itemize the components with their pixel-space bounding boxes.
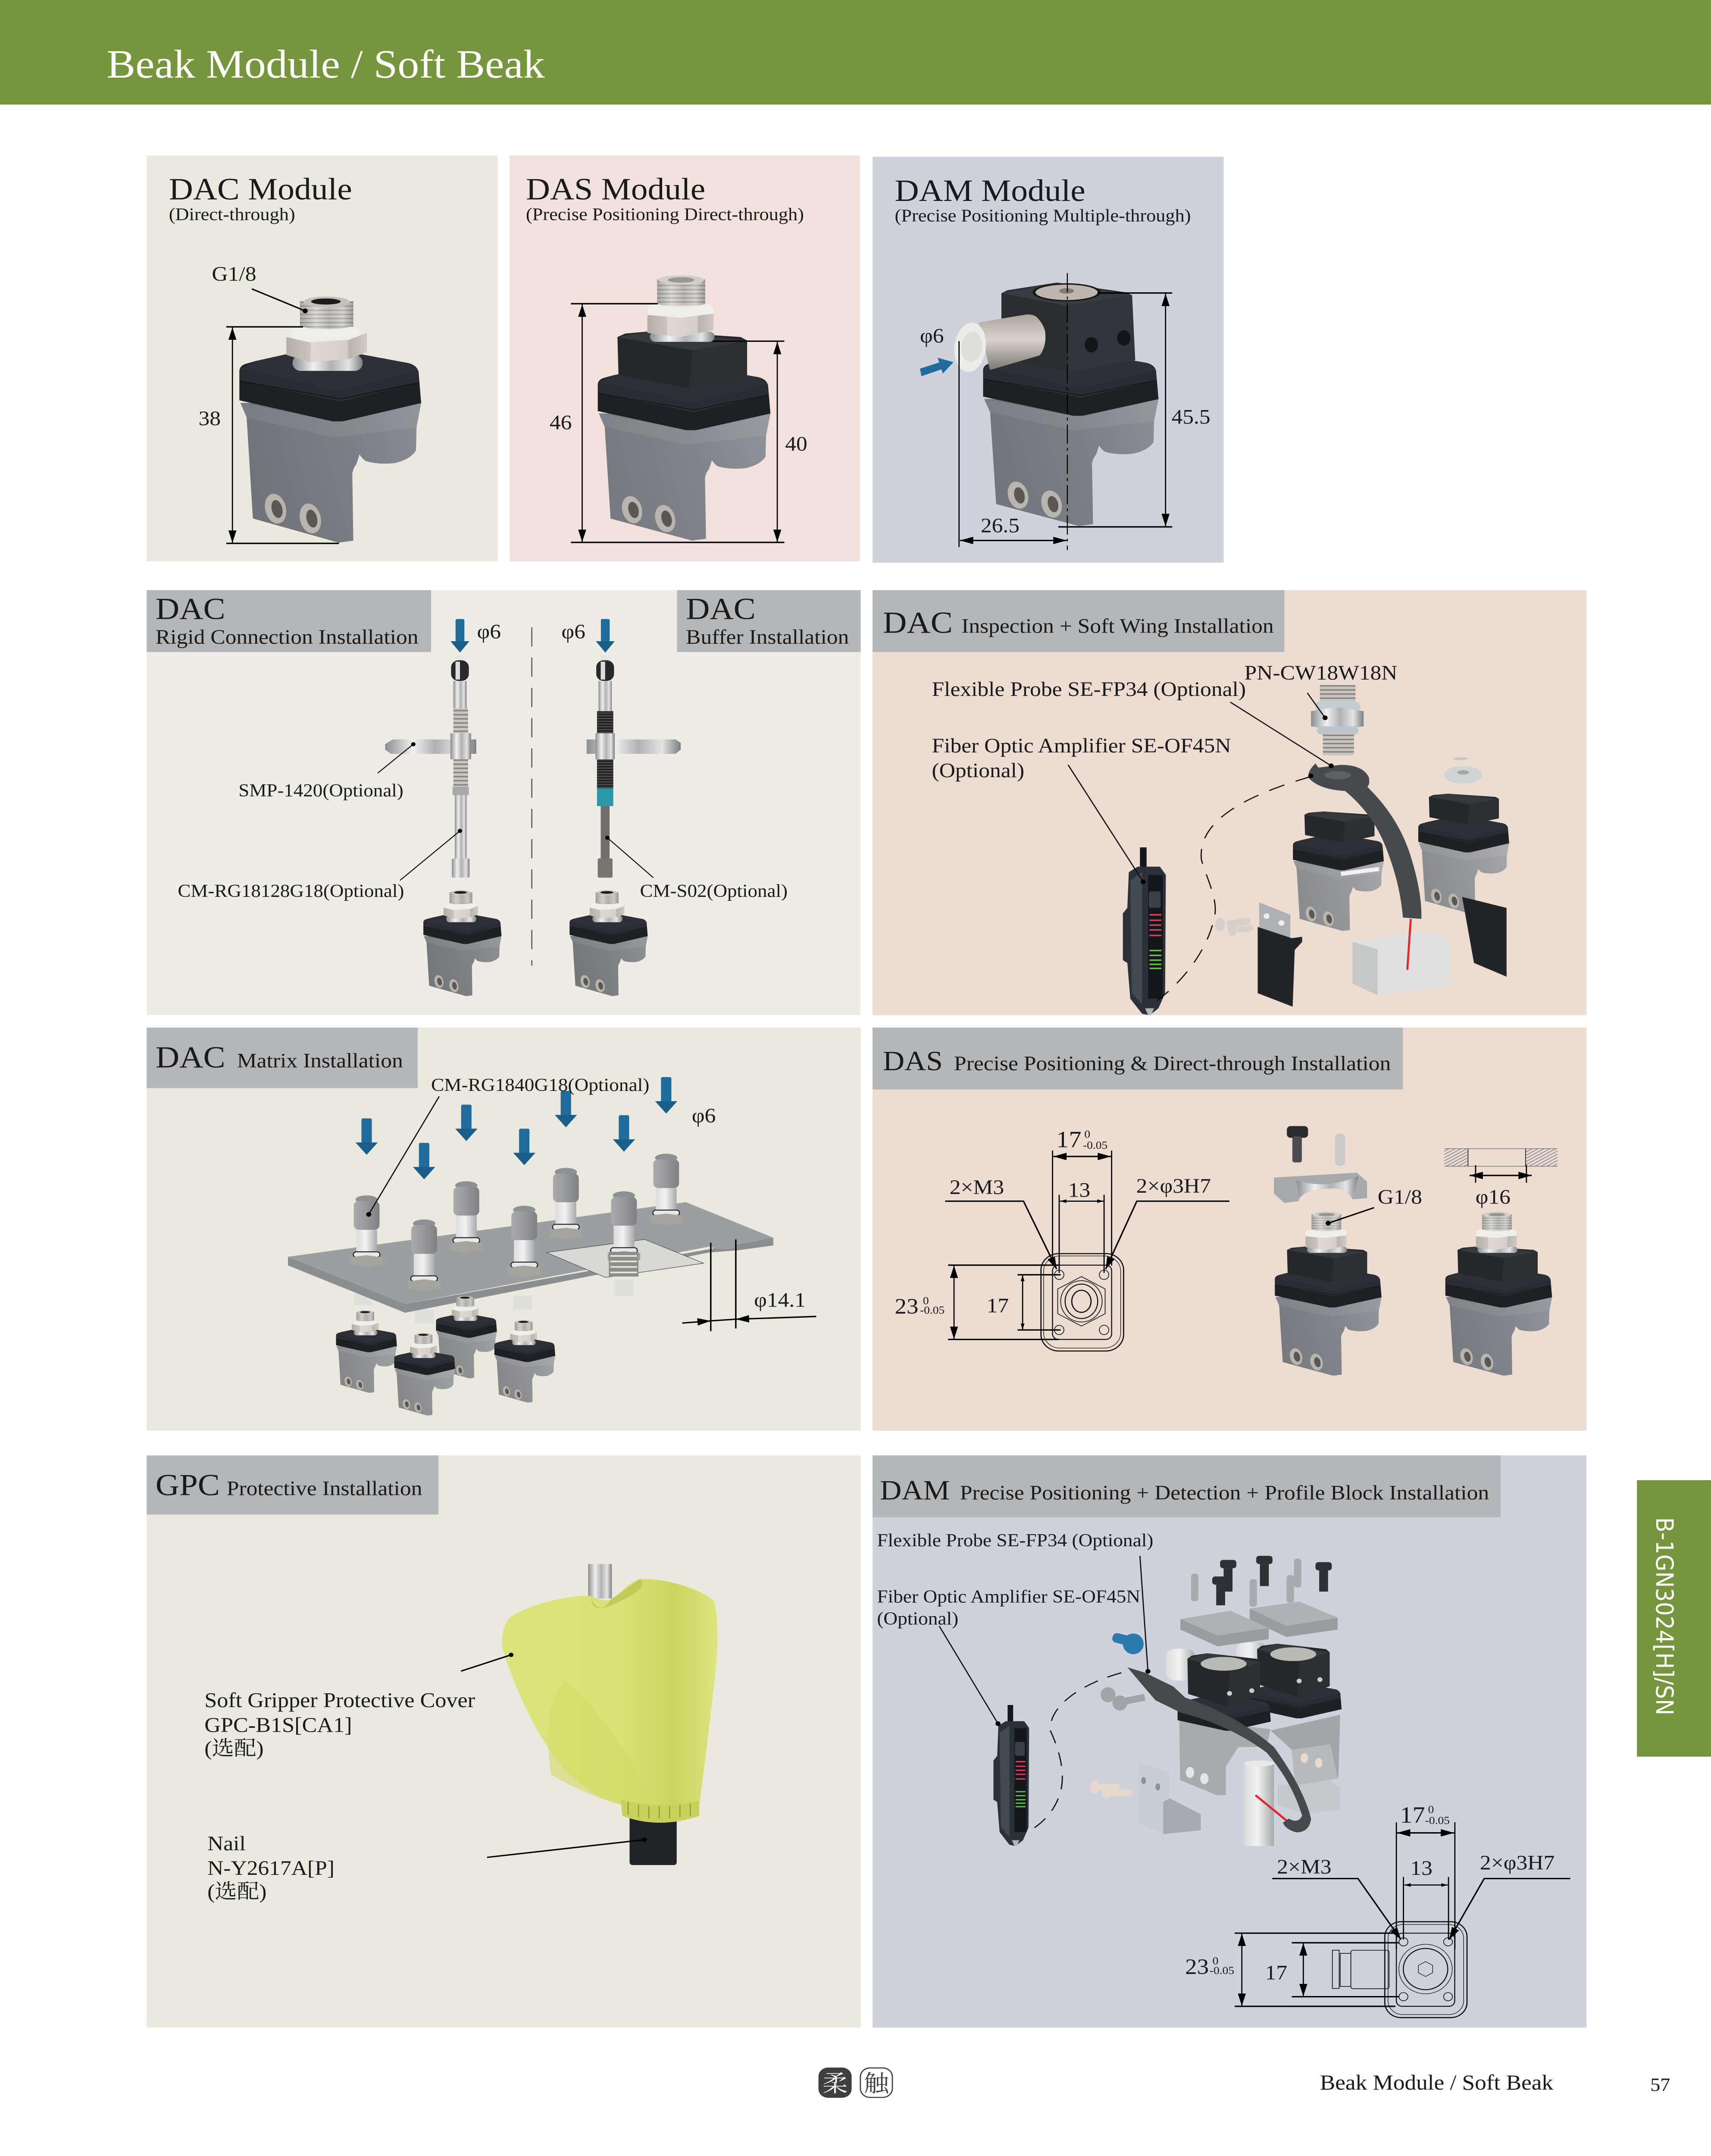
leader: amplifier bbox=[1068, 765, 1146, 884]
callout: G1/8: G1/8 bbox=[212, 262, 256, 285]
fitting: PN-CW18W18N bbox=[1311, 685, 1364, 755]
callout: cover bbox=[204, 1689, 475, 1760]
dimension: φ14.1: φ14.1 bbox=[754, 1288, 806, 1311]
label: flexible probe: Flexible Probe SE-FP34 (Optional) bbox=[877, 1530, 1153, 1550]
panel: GPC protective installation bbox=[147, 1455, 861, 2028]
callout: nail: Nail bbox=[207, 1832, 246, 1855]
section drawing: φ16 hole bbox=[1444, 1149, 1558, 1208]
logo bbox=[819, 2065, 892, 2099]
red laser line bbox=[1255, 1795, 1286, 1821]
part: left soft gripper module bbox=[1293, 812, 1384, 931]
heading tab: inspection: DAC bbox=[883, 605, 953, 639]
part: left jaw plate bbox=[1257, 903, 1302, 1007]
dimension: 17 bbox=[987, 1275, 1060, 1330]
heading tab: DAS: DAS bbox=[883, 1046, 943, 1076]
parts: dowel pins bbox=[1191, 1558, 1301, 1607]
dimension: 13: 13 bbox=[1410, 1857, 1433, 1880]
dimension: 23 tolerance: -0.05 bbox=[1210, 1964, 1234, 1977]
dimension: 38 bbox=[198, 327, 339, 543]
inlet arrows bbox=[356, 1077, 677, 1179]
dimension: 17 tolerance: -0.05 bbox=[1425, 1814, 1450, 1827]
logo: 触 bbox=[864, 2065, 890, 2099]
label: fiber optic amplifier bbox=[877, 1587, 1140, 1629]
part: left block and cap bbox=[1178, 1653, 1271, 1731]
product photo: DAS module bbox=[598, 275, 770, 541]
panel: DAM Module bbox=[873, 157, 1223, 563]
heading tab: buffer bbox=[677, 590, 861, 652]
panel: DAS Module bbox=[510, 155, 860, 561]
dimension: 40: 40 bbox=[785, 432, 807, 455]
callout: 2×φ3H7: 2×φ3H7 bbox=[1136, 1175, 1211, 1197]
panel: DAC Module bbox=[147, 155, 498, 561]
callout: CM-RG18128G18 bbox=[178, 829, 462, 901]
heading: DAM Module: DAM Module bbox=[895, 173, 1085, 208]
part: right gripper body bbox=[1270, 1715, 1340, 1814]
heading tab: matrix: Matrix Installation bbox=[237, 1049, 403, 1072]
callout: nail bbox=[207, 1832, 335, 1903]
leader: PN fitting bbox=[1307, 693, 1328, 720]
panel: DAC matrix installation bbox=[147, 1028, 861, 1431]
subtitle: precise positioning direct-through: (Precise Positioning Direct-through) bbox=[526, 205, 804, 224]
dimension: 13 bbox=[1404, 1857, 1448, 1940]
heading tab: inspection bbox=[873, 590, 1284, 652]
heading tab: rigid connection: DAC bbox=[156, 592, 225, 626]
fiber optic amplifier bbox=[994, 1705, 1029, 1846]
side tab bbox=[1637, 1480, 1711, 1757]
section drawing: φ16 hole: φ16 bbox=[1476, 1185, 1511, 1208]
part: clamp bracket bbox=[1274, 1173, 1367, 1203]
heading tab: buffer: Buffer Installation bbox=[686, 626, 849, 649]
label: fiber optic amplifier: Fiber Optic Amplifier SE-OF45N bbox=[877, 1587, 1140, 1607]
part: screws bbox=[1215, 917, 1254, 936]
label: fiber optic amplifier: (Optional) bbox=[932, 759, 1024, 782]
part: L bracket bbox=[1139, 1762, 1201, 1834]
lower fitting stubs bbox=[354, 1279, 633, 1323]
part: white elbows bbox=[1166, 1642, 1266, 1680]
arrow: rigid inlet φ6 bbox=[450, 619, 501, 652]
callout: cover: GPC-B1S[CA1] bbox=[204, 1713, 352, 1736]
dimension: 45.5: 45.5 bbox=[1171, 405, 1211, 428]
red laser line bbox=[1408, 919, 1411, 970]
dimension: 17 tolerance: 17 bbox=[1056, 1127, 1082, 1153]
label: φ6: φ6 bbox=[692, 1104, 716, 1127]
dimension: 17 tolerance: 17 bbox=[1400, 1802, 1425, 1828]
callout: nail: (选配) bbox=[207, 1880, 266, 1903]
logo: 柔 bbox=[823, 2065, 848, 2099]
dimension: 26.5: 26.5 bbox=[981, 514, 1020, 537]
part: blue plug bbox=[1111, 1632, 1144, 1654]
dimension: 46: 46 bbox=[550, 411, 572, 434]
dimension: 23 tolerance: 23 bbox=[1185, 1955, 1209, 1979]
callout: 2×φ3H7 bbox=[1449, 1851, 1570, 1940]
callout: 2×M3 bbox=[1272, 1855, 1401, 1940]
heading: DAC Module: DAC Module bbox=[169, 172, 352, 207]
dimension: 17: 17 bbox=[987, 1294, 1009, 1317]
arrow: rigid inlet φ6: φ6 bbox=[477, 620, 501, 643]
part: gray screws bbox=[1101, 1687, 1145, 1711]
label: PN-CW18W18N: PN-CW18W18N bbox=[1245, 661, 1398, 684]
dimension: 23 tolerance: -0.05 bbox=[920, 1304, 945, 1316]
callout: 2×φ3H7: 2×φ3H7 bbox=[1480, 1851, 1555, 1874]
dimension: 13: 13 bbox=[1068, 1178, 1090, 1201]
subtitle: direct-through: (Direct-through) bbox=[169, 205, 295, 224]
callout: 2×φ3H7 bbox=[1106, 1175, 1229, 1269]
side tab label: B-1GN3024[H]/SN bbox=[1650, 1517, 1678, 1715]
mounting plate bbox=[288, 1202, 773, 1313]
heading tab: buffer: DAC bbox=[686, 592, 756, 626]
arrow: buffer inlet φ6 bbox=[561, 619, 615, 652]
dimension: 45.5 bbox=[1058, 293, 1211, 527]
part: flexible probe bbox=[1127, 1667, 1311, 1832]
dimension: 17 bbox=[1265, 1943, 1399, 1997]
heading tab: rigid connection: Rigid Connection Installation bbox=[156, 626, 419, 649]
callout: CM-S02 bbox=[605, 836, 788, 901]
icon: blue inlet arrow bbox=[920, 357, 954, 376]
heading tab: GPC: GPC bbox=[156, 1468, 220, 1502]
heading tab: matrix: DAC bbox=[156, 1040, 225, 1074]
part: cylinder workpiece bbox=[1245, 1761, 1274, 1846]
part: right block and cap bbox=[1248, 1644, 1342, 1718]
heading tab: DAS: Precise Positioning & Direct-through Installation bbox=[954, 1052, 1391, 1075]
heading tab: DAM bbox=[873, 1455, 1501, 1517]
part: mounting plates bbox=[1180, 1601, 1338, 1646]
dimension: 23 tolerance bbox=[895, 1265, 1059, 1339]
dimension: 46 bbox=[550, 304, 785, 542]
callout: nail: N-Y2617A[P] bbox=[207, 1857, 335, 1880]
dimension: 38: 38 bbox=[198, 407, 221, 429]
leader: flexible probe bbox=[1230, 702, 1334, 778]
panel: DAM precise positioning and detection bbox=[873, 1455, 1586, 2028]
arrow: buffer inlet φ6: φ6 bbox=[561, 620, 585, 643]
page title: Beak Module / Soft Beak bbox=[106, 42, 545, 86]
header banner bbox=[0, 0, 1711, 104]
heading tab: matrix bbox=[147, 1028, 418, 1088]
air fittings array bbox=[350, 1154, 682, 1291]
dimension: 23 tolerance: 23 bbox=[895, 1294, 919, 1319]
dashed fiber cable bbox=[1157, 777, 1311, 1001]
callout: 2×M3: 2×M3 bbox=[1277, 1855, 1332, 1878]
rod assembly: buffer bbox=[587, 655, 681, 877]
callout: G1/8 bbox=[212, 262, 308, 313]
protective cover on gripper bbox=[502, 1564, 718, 1865]
fiber optic amplifier bbox=[1123, 847, 1166, 1015]
part: cream screws bbox=[1090, 1781, 1132, 1799]
panel: DAC rigid and buffer installation bbox=[147, 590, 861, 1015]
label: φ6: φ6 bbox=[920, 324, 944, 347]
part: white block bbox=[1352, 931, 1450, 995]
heading tab: DAS bbox=[873, 1028, 1403, 1090]
label: flexible probe: Flexible Probe SE-FP34 (Optional) bbox=[932, 678, 1246, 701]
dimension: φ14.1 bbox=[682, 1239, 816, 1331]
dimension: 17 tolerance bbox=[1053, 1127, 1112, 1266]
leader: nail bbox=[487, 1837, 647, 1857]
technical drawing: DAM footprint bbox=[1333, 1922, 1467, 2018]
module: DAS right bbox=[1445, 1212, 1552, 1376]
part: right soft gripper module bbox=[1418, 794, 1509, 913]
dimension: 17 tolerance bbox=[1396, 1802, 1455, 1949]
dimension: 17: 17 bbox=[1265, 1961, 1287, 1984]
callout: CM-RG18128G18: CM-RG18128G18(Optional) bbox=[178, 881, 404, 901]
product photo: DAM module bbox=[952, 282, 1158, 526]
heading: DAS Module: DAS Module bbox=[526, 172, 705, 207]
label: CM-RG1840G18: CM-RG1840G18(Optional) bbox=[431, 1075, 649, 1095]
callout: G1/8 bbox=[1326, 1185, 1422, 1225]
module: rigid bbox=[423, 890, 501, 996]
dimension: 17 tolerance: 0 bbox=[1084, 1128, 1090, 1140]
rod assembly: rigid bbox=[385, 655, 476, 877]
leader: amplifier bbox=[939, 1626, 1001, 1726]
label: fiber optic amplifier: (Optional) bbox=[877, 1609, 958, 1629]
dimension: 17 tolerance: 0 bbox=[1428, 1803, 1434, 1815]
page number: 57 bbox=[1650, 2075, 1670, 2095]
heading tab: inspection: Inspection + Soft Wing Installation bbox=[961, 614, 1274, 637]
dashed fiber cable bbox=[1029, 1673, 1121, 1831]
subtitle: precise positioning multiple-through: (Precise Positioning Multiple-through) bbox=[895, 206, 1191, 226]
dimension: 23 tolerance: 0 bbox=[923, 1294, 929, 1307]
parts: screws bbox=[1212, 1556, 1332, 1605]
module: DAS left bbox=[1275, 1212, 1382, 1376]
callout: 2×M3 bbox=[945, 1176, 1057, 1269]
callout: cover: (选配) bbox=[204, 1737, 264, 1760]
callout: cover: Soft Gripper Protective Cover bbox=[204, 1689, 475, 1712]
callout: SMP-1420: SMP-1420(Optional) bbox=[238, 781, 404, 801]
part: screw and pin bbox=[1287, 1126, 1345, 1166]
label: fiber optic amplifier bbox=[932, 734, 1231, 782]
label: fiber optic amplifier: Fiber Optic Amplifier SE-OF45N bbox=[932, 734, 1231, 757]
callout: CM-S02: CM-S02(Optional) bbox=[640, 881, 788, 901]
leader: flexible probe bbox=[1140, 1556, 1151, 1674]
heading tab: rigid connection bbox=[147, 590, 431, 652]
dimension: 17 tolerance: -0.05 bbox=[1083, 1139, 1107, 1151]
heading tab: DAM: Precise Positioning + Detection + Profile Block Installation bbox=[960, 1481, 1489, 1504]
modules below plate bbox=[336, 1296, 555, 1416]
module: buffer bbox=[569, 890, 648, 996]
part: left gripper body bbox=[1179, 1718, 1270, 1795]
technical drawing: DAS footprint bbox=[1041, 1253, 1123, 1351]
callout: G1/8: G1/8 bbox=[1378, 1185, 1422, 1208]
callout: 2×M3: 2×M3 bbox=[950, 1176, 1004, 1199]
part: flexible probe bbox=[1308, 764, 1421, 919]
heading tab: DAM: DAM bbox=[880, 1475, 950, 1506]
dimension: 23 tolerance bbox=[1185, 1933, 1395, 2006]
part: O-ring bbox=[1444, 757, 1483, 783]
heading tab: GPC: Protective Installation bbox=[227, 1477, 422, 1500]
leader: cover bbox=[461, 1653, 513, 1671]
dimension: 13 bbox=[1059, 1178, 1104, 1273]
dimension: 23 tolerance: 0 bbox=[1213, 1955, 1218, 1967]
callout: SMP-1420 bbox=[238, 742, 416, 801]
leader: fitting bbox=[366, 1097, 439, 1217]
heading tab: GPC bbox=[147, 1455, 438, 1514]
product photo: DAC module bbox=[239, 296, 421, 543]
panel: DAC inspection and soft wing bbox=[873, 590, 1586, 1015]
part: right jaw bbox=[1462, 897, 1507, 977]
footer title: Beak Module / Soft Beak bbox=[1320, 2071, 1553, 2094]
panel: DAS precise positioning bbox=[873, 1028, 1586, 1431]
